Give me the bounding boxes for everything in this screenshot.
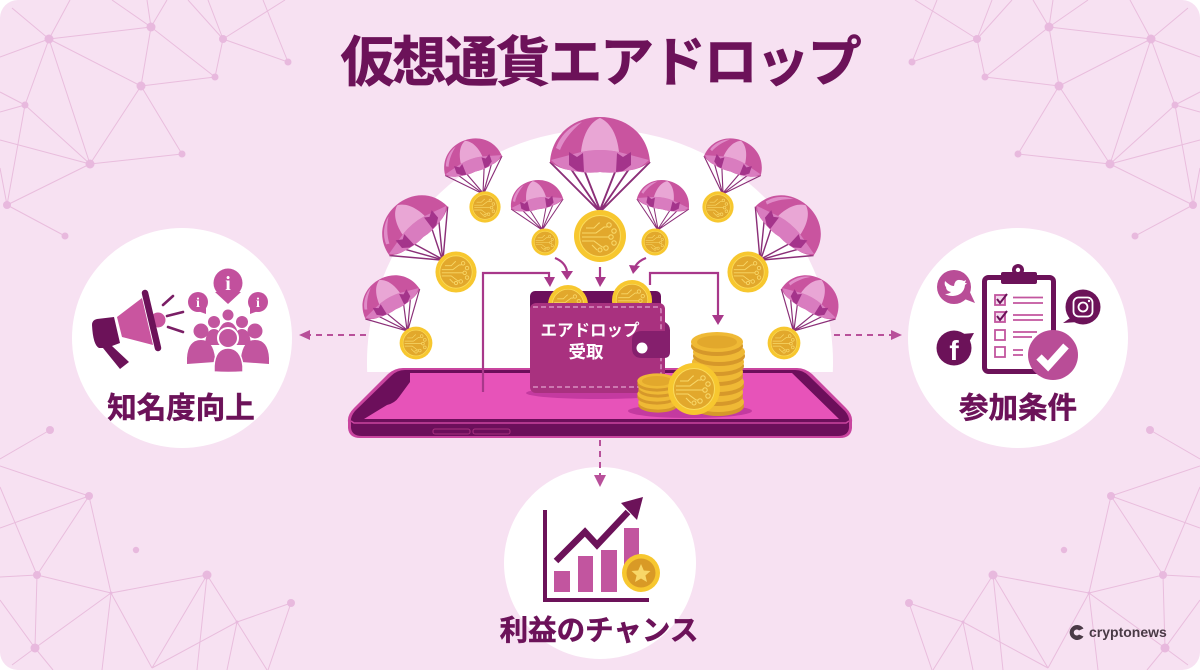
parachute coin: center large bbox=[550, 117, 650, 262]
arrow: dashed to conditions bbox=[834, 330, 902, 340]
logo: cryptonews: cryptonews bbox=[1089, 624, 1167, 640]
icon: clipboard bbox=[984, 264, 1078, 380]
icon: audience with info bubbles: i bbox=[225, 273, 231, 295]
label: awareness: 知名度向上 bbox=[107, 392, 255, 425]
icon: instagram bbox=[1063, 290, 1100, 324]
icon: audience with info bubbles: i bbox=[196, 296, 200, 311]
icon: facebook: f bbox=[949, 335, 959, 366]
panel: profit opportunity bbox=[500, 467, 698, 659]
icon: audience with info bubbles: i bbox=[256, 296, 260, 311]
arrows into wallet bbox=[483, 258, 724, 392]
icon: facebook bbox=[936, 330, 974, 366]
arrow: dashed to awareness bbox=[299, 330, 366, 340]
coins entering wallet bbox=[548, 280, 652, 303]
wallet: 受取 bbox=[568, 342, 604, 362]
label: profit opportunity: 利益のチャンス bbox=[500, 615, 698, 647]
parachute coin: middle left bbox=[367, 180, 477, 293]
phone bbox=[348, 368, 852, 438]
parachute coin: inner left bbox=[507, 176, 568, 256]
chart: rising bars bbox=[545, 497, 649, 600]
icon: audience with info bubbles bbox=[187, 268, 269, 372]
arrow: dashed to profit bbox=[594, 440, 606, 487]
coin stacks bbox=[637, 332, 745, 416]
shadows under wallet and coins bbox=[526, 387, 752, 418]
panel: awareness bbox=[72, 228, 292, 448]
label: participation conditions: 参加条件 bbox=[959, 392, 1077, 425]
parachute coin: upper left bbox=[436, 130, 511, 223]
wallet clasp bbox=[632, 322, 670, 358]
icon: star coin bbox=[622, 554, 660, 592]
parachute coin: lower left bbox=[352, 265, 434, 359]
parachute coin: upper right bbox=[695, 130, 770, 223]
phone side buttons bbox=[433, 429, 510, 434]
icon: twitter bbox=[937, 270, 975, 304]
phone screen bbox=[364, 373, 839, 419]
parachute coin: middle right bbox=[727, 180, 836, 293]
panel: participation conditions bbox=[908, 228, 1128, 448]
central white semicircle bbox=[367, 129, 833, 372]
icon: megaphone bbox=[92, 293, 183, 369]
title: 仮想通貨エアドロップ bbox=[340, 33, 861, 93]
parachute coin: lower right bbox=[767, 265, 849, 359]
parachute coin: inner right bbox=[632, 176, 693, 256]
wallet label: エアドロップ bbox=[540, 321, 640, 340]
wallet bbox=[530, 280, 670, 393]
